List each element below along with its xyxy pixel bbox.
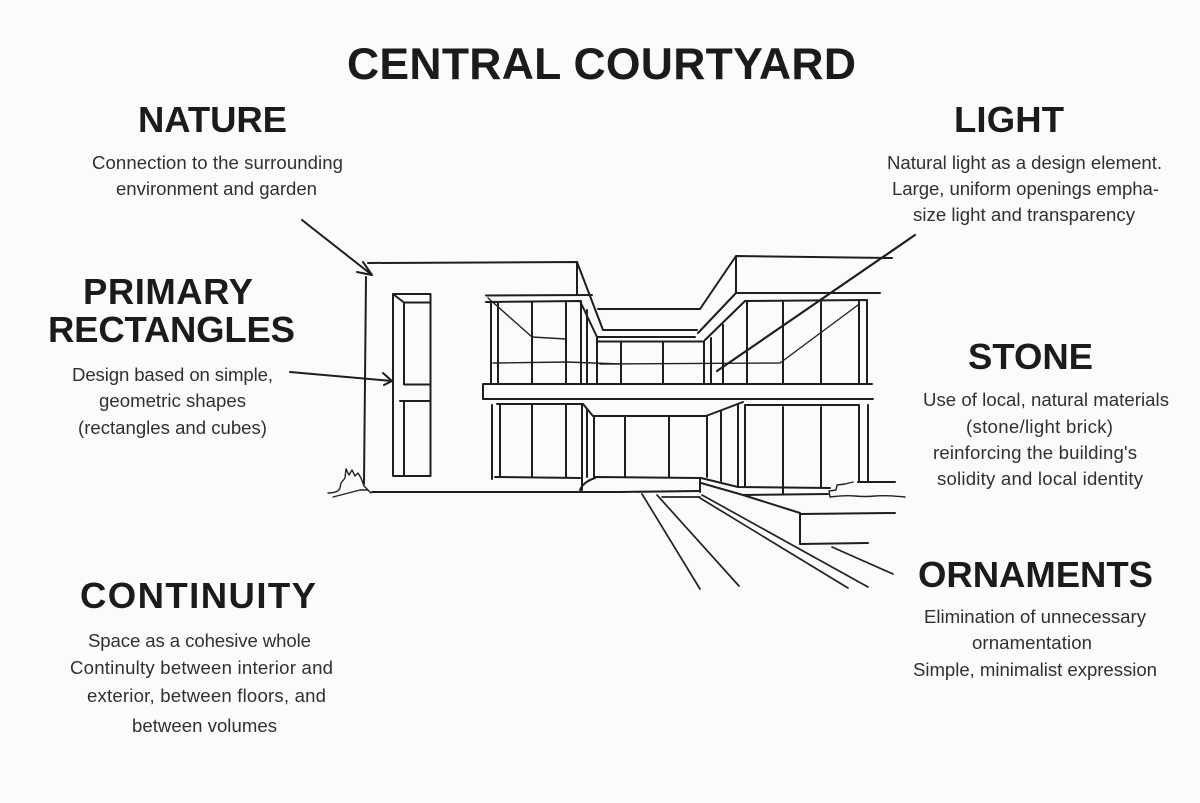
text block: ornaments: ornamentation: [972, 632, 1092, 653]
text block: ornaments: [913, 606, 1157, 680]
entry terrace and steps: [700, 478, 895, 544]
text block: stone: Use of local, natural materials: [923, 389, 1169, 410]
tall window: [393, 294, 430, 476]
text block: light: Natural light as a design element.: [887, 152, 1162, 173]
text block: nature: Connection to the surrounding: [92, 152, 343, 173]
arrow: nature: [302, 220, 372, 275]
text block: stone: reinforcing the building's: [933, 442, 1137, 463]
text block: ornaments: Elimination of unnecessary: [924, 606, 1147, 627]
text block: light: [887, 152, 1162, 225]
upper glazing left: [486, 295, 597, 384]
right roof volume: [698, 256, 892, 384]
roof link: [577, 262, 704, 384]
text block: continuity: between volumes: [132, 715, 277, 736]
heading: nature: NATURE: [138, 99, 287, 140]
text block: nature: [92, 152, 343, 199]
text block: light: size light and transparency: [913, 204, 1136, 225]
heading: primary rectangles: PRIMARY: [83, 271, 253, 312]
pathway lines: [642, 494, 893, 589]
lower glazing right: [625, 402, 868, 493]
arrow: primary rectangles: [290, 372, 392, 385]
building sketch: [328, 256, 905, 589]
heading: stone: STONE: [968, 336, 1093, 377]
upper glazing reflection lines: [488, 298, 858, 364]
title: CENTRAL COURTYARD: [347, 40, 856, 89]
text block: stone: solidity and local identity: [937, 468, 1144, 489]
text block: primary rectangles: geometric shapes: [99, 390, 246, 411]
heading: primary rectangles: RECTANGLES: [48, 309, 295, 350]
panel: continuity: [70, 575, 333, 736]
panel: ornaments: [913, 554, 1157, 680]
text block: stone: [923, 389, 1169, 489]
heading: light: LIGHT: [954, 99, 1064, 140]
left wall volume: [364, 262, 700, 492]
text block: continuity: [70, 630, 333, 736]
text block: continuity: exterior, between floors, and: [87, 685, 326, 706]
panel: light: [887, 99, 1162, 225]
heading: ornaments: ORNAMENTS: [918, 554, 1153, 595]
lower glazing left: [492, 404, 706, 490]
right garden scribble: [829, 482, 905, 497]
heading: continuity: CONTINUITY: [80, 575, 316, 616]
panel: primary rectangles: [48, 271, 295, 438]
text block: light: Large, uniform openings empha-: [892, 178, 1159, 199]
text block: nature: environment and garden: [116, 178, 317, 199]
panel: stone: [923, 336, 1169, 489]
text block: stone: (stone/light brick): [966, 416, 1113, 437]
text block: ornaments: Simple, minimalist expression: [913, 659, 1157, 680]
text block: continuity: Continulty between interior and: [70, 657, 333, 678]
heading: primary rectangles: [48, 271, 295, 350]
text block: continuity: Space as a cohesive whole: [88, 630, 311, 651]
balcony slab: [483, 384, 873, 399]
text block: primary rectangles: [72, 364, 273, 438]
arrow: light: [717, 235, 915, 371]
panel: nature: [92, 99, 343, 199]
text block: primary rectangles: (rectangles and cubes): [78, 417, 267, 438]
text block: primary rectangles: Design based on simple,: [72, 364, 273, 385]
left grass tuft: [328, 469, 371, 497]
